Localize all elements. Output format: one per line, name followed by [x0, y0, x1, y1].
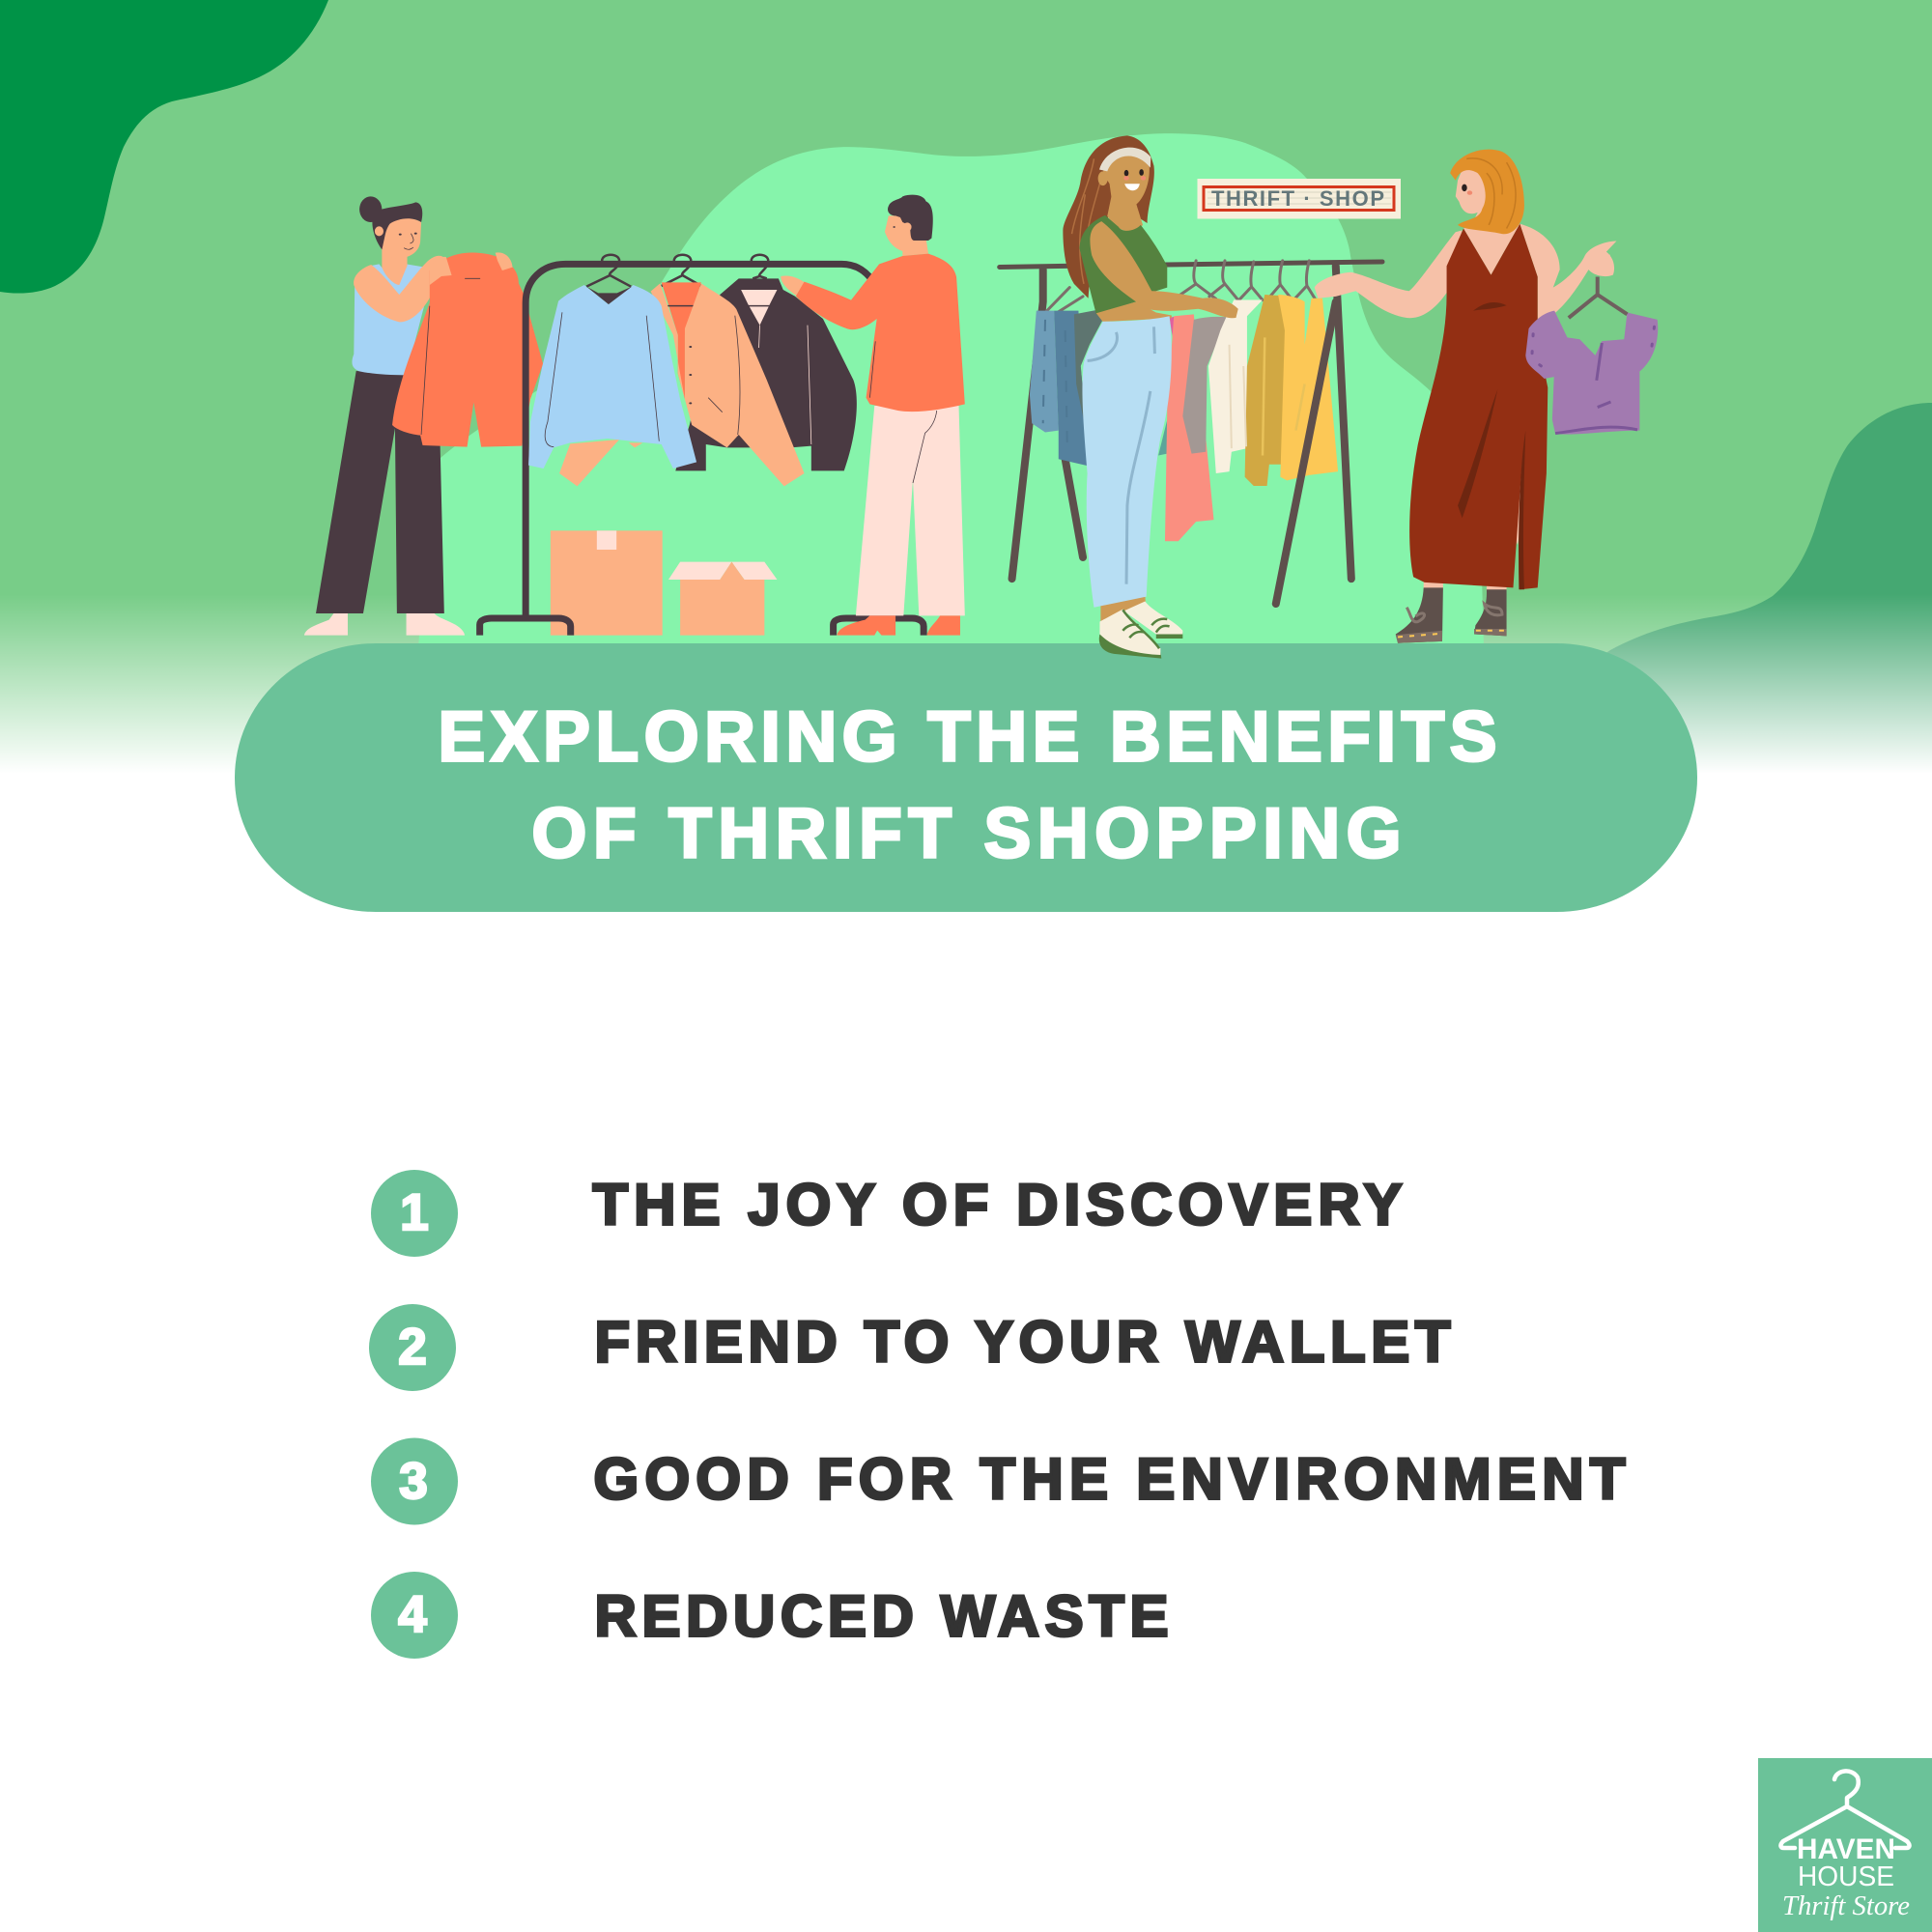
benefit 4: REDUCED WASTE	[595, 1584, 1169, 1648]
woman's trousers and shoes	[304, 371, 465, 636]
benefit 1: 1	[400, 1184, 429, 1241]
benefit 3	[371, 1437, 1625, 1524]
peach cardigan on rack	[559, 282, 805, 486]
benefit 4	[371, 1572, 1169, 1659]
benefit 2: 2	[398, 1319, 427, 1376]
blob: mid green right	[1565, 403, 1932, 773]
title text: EXPLORING THE BENEFITS	[439, 697, 1497, 777]
clothes rack	[480, 264, 923, 636]
title text: OF THRIFT SHOPPING	[531, 794, 1401, 873]
benefit 2: FRIEND TO YOUR WALLET	[595, 1310, 1451, 1374]
hanging clothes	[1165, 295, 1338, 541]
logo: Haven House Thrift Store: HAVEN	[1797, 1833, 1895, 1865]
illustration: woman and man at clothes rack	[304, 195, 965, 636]
woman in red dress	[1315, 150, 1616, 643]
blob: light green behind shoppers	[418, 133, 1484, 647]
hanging jeans	[1030, 309, 1167, 467]
orange garment held up	[392, 252, 543, 447]
blob: dark green top-left	[0, 0, 328, 294]
purple top on hanger	[1525, 255, 1658, 435]
rack back parts	[1000, 262, 1382, 579]
benefit 1	[371, 1170, 1403, 1257]
benefit 1: THE JOY OF DISCOVERY	[593, 1173, 1403, 1236]
front rack leg	[1276, 301, 1336, 604]
logo: Haven House Thrift Store	[1758, 1758, 1932, 1932]
title pill	[235, 643, 1697, 912]
icon: hanger	[1780, 1771, 1910, 1848]
hangers	[586, 255, 768, 287]
illustration: two women at thrift shop rack	[1000, 135, 1658, 659]
woman in green top	[1063, 135, 1238, 659]
benefit 2	[369, 1304, 1451, 1391]
man	[781, 195, 965, 636]
title text	[439, 697, 1497, 873]
benefit 4: 4	[398, 1586, 427, 1643]
benefit 3: GOOD FOR THE ENVIRONMENT	[593, 1447, 1625, 1511]
header background	[0, 0, 1932, 774]
thrift shop sign	[1198, 179, 1401, 218]
logo: Haven House Thrift Store: Thrift Store	[1782, 1890, 1910, 1921]
woman's top, head and arm	[352, 196, 451, 375]
black jacket on rack	[675, 278, 857, 470]
blue sweater on rack	[528, 285, 696, 469]
benefit 3: 3	[399, 1453, 428, 1510]
thrift shop sign: THRIFT · SHOP	[1211, 186, 1384, 211]
logo: Haven House Thrift Store: HOUSE	[1798, 1861, 1894, 1892]
hangers on rack	[1045, 261, 1316, 313]
boxes	[551, 530, 777, 636]
